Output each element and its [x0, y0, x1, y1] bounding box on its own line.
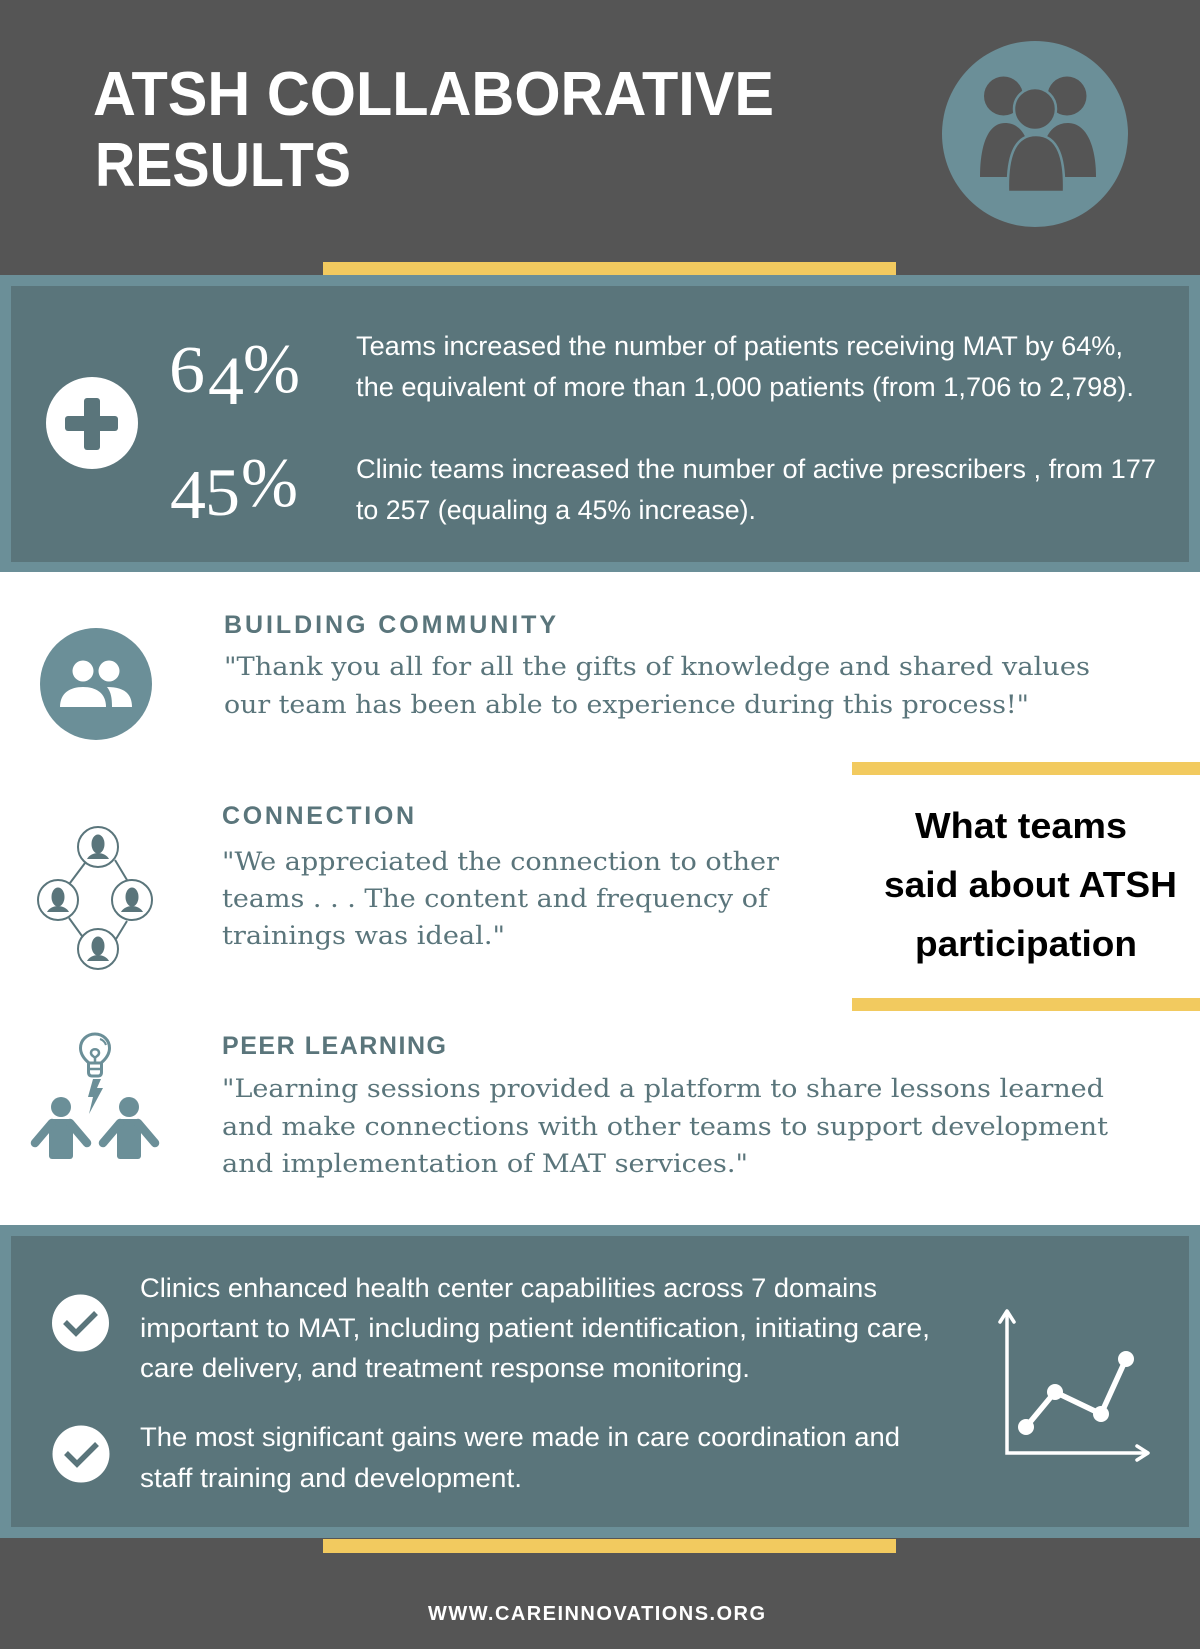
stat: 64%	[169, 331, 300, 419]
icon: check 1	[52, 1294, 109, 1352]
quote	[224, 652, 1090, 719]
heading: PEER LEARNING	[222, 1032, 446, 1060]
section: building community	[40, 611, 1090, 740]
quote: trainings was ideal."	[222, 921, 505, 950]
quote: teams . . . The content and frequency of	[222, 884, 770, 913]
icon: check 2	[52, 1426, 110, 1482]
header band	[0, 0, 1200, 275]
icon: two people and lightbulb	[35, 1034, 155, 1159]
callout: what teams said: participation	[915, 923, 1137, 964]
quote: "Thank you all for all the gifts of knowledge and shared values	[224, 652, 1090, 681]
stat: 64%: %	[243, 331, 300, 408]
website: WWW.CAREINNOVATIONS.ORG	[428, 1603, 765, 1625]
section: peer learning	[35, 1032, 1108, 1178]
title: ATSH COLLABORATIVE	[93, 60, 774, 129]
icon: plus	[46, 377, 138, 469]
text: significant gains: The most significant gains were made in care coordination and	[140, 1422, 900, 1452]
icon: group of people	[942, 41, 1128, 227]
text: active prescribers: to 257 (equaling a 45% increase).	[356, 495, 756, 525]
heading: BUILDING COMMUNITY	[224, 611, 556, 639]
stat: 45%: 5	[205, 454, 240, 530]
accent bar: bottom	[323, 1539, 896, 1553]
text: significant gains: staff training and development.	[140, 1463, 522, 1493]
quote: "Learning sessions provided a platform to share lessons learned	[222, 1074, 1104, 1103]
icon: two people in circle	[40, 628, 152, 740]
callout: what teams said: said about ATSH	[884, 864, 1177, 905]
text: capabilities across domains: important to MAT, including patient identification, initiating care,	[140, 1313, 930, 1343]
quote: and make connections with other teams to support development	[222, 1112, 1108, 1141]
stat: 45%	[170, 445, 298, 534]
callout: what teams said	[852, 762, 1200, 1011]
icon: line chart	[1000, 1311, 1148, 1460]
text: capabilities across domains: Clinics enhanced health center capabilities across 7 domains	[140, 1273, 877, 1303]
text: patients receiving MAT	[356, 331, 1134, 402]
stat: 64%: 6	[169, 333, 205, 407]
title	[93, 60, 774, 200]
heading: CONNECTION	[222, 802, 414, 830]
quote: "We appreciated the connection to other	[222, 847, 779, 876]
accent bar: top	[323, 262, 896, 275]
text: capabilities across domains	[140, 1273, 930, 1383]
text: significant gains	[140, 1422, 900, 1493]
quote	[222, 1074, 1108, 1178]
text: patients receiving MAT: the equivalent of more than 1,000 patients (from 1,706 to 2,798).	[356, 372, 1134, 402]
quote: and implementation of MAT services."	[222, 1149, 748, 1178]
footer band	[0, 1538, 1200, 1649]
section: connection	[38, 802, 779, 969]
panel: key statistics	[0, 275, 1200, 572]
text: capabilities across domains: care delivery, and treatment response monitoring.	[140, 1353, 750, 1383]
stat: 45%: 4	[170, 457, 206, 534]
quote: our team has been able to experience during this process!"	[224, 690, 1029, 719]
panel: capabilities	[0, 1225, 1200, 1538]
stat: 45%: %	[241, 445, 298, 522]
callout: what teams said: What teams	[915, 805, 1127, 846]
text: active prescribers: Clinic teams increased the number of active prescribers , from 177	[356, 454, 1156, 484]
text: active prescribers	[356, 454, 1156, 525]
text: patients receiving MAT: Teams increased the number of patients receiving MAT by 64%,	[356, 331, 1123, 361]
icon: connected people network	[38, 827, 152, 969]
stat: 64%: 4	[208, 343, 244, 419]
title: RESULTS	[95, 131, 351, 200]
quote	[222, 847, 779, 950]
